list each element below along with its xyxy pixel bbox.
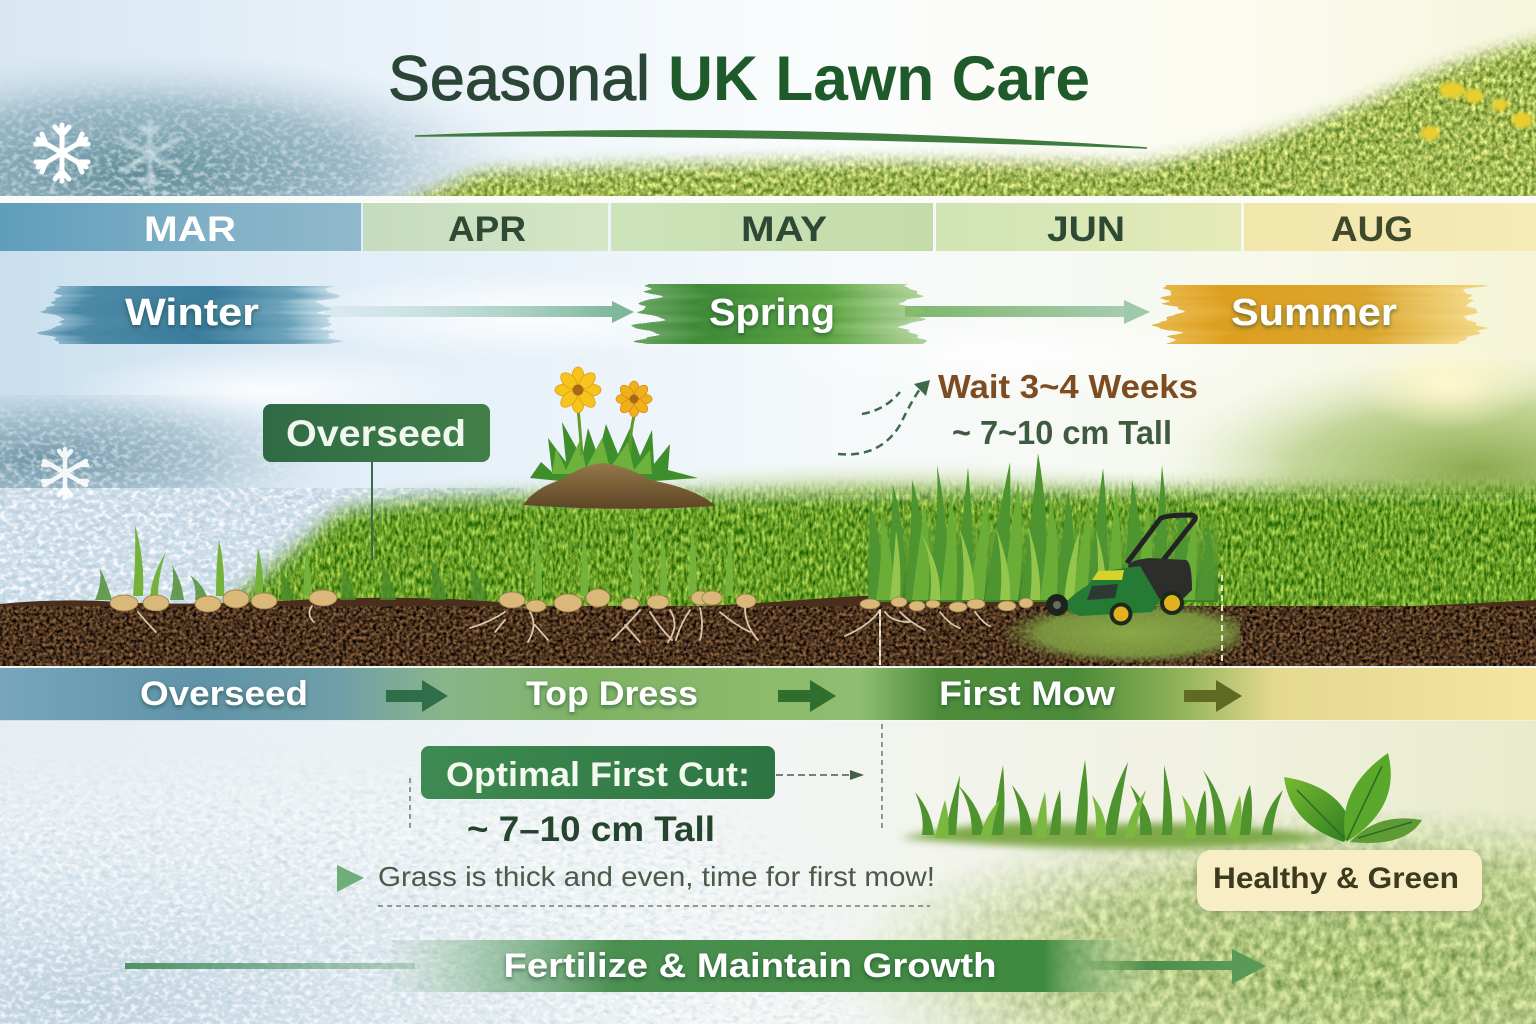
arrow band: fertilize and maintain growth [125,940,1266,992]
month: JUN: JUN [1047,210,1125,249]
month: MAR: MAR [144,210,236,249]
flower small [616,381,652,417]
note: wait time: Wait 3~4 Weeks [938,368,1198,405]
connector: overseed stem [371,462,373,560]
short blades near soil [95,558,486,600]
icon: faint snowflake header [122,123,178,187]
month: MAR [0,203,361,251]
note: wait time: ~ 7~10 cm Tall [952,414,1172,451]
season: Spring [648,284,912,344]
tall grass [868,453,1218,602]
panel: header scene [0,0,1536,198]
month: MAY [611,203,933,251]
badge: Healthy & Green: Healthy & Green [1213,862,1459,895]
panel: process band [0,666,1536,720]
title: Seasonal [388,44,650,114]
arrow: step two [778,680,836,712]
callout: optimal first cut [421,746,775,799]
seeds [110,589,1033,612]
arrow: step three [1184,680,1242,712]
icon: green leaves [1284,753,1422,843]
month: MAY: MAY [741,210,827,249]
text: height: ~ 7–10 cm Tall [467,810,715,849]
snow field left [0,771,868,1024]
arrow: dashed curve [838,386,922,454]
season: Spring: Spring [709,292,835,334]
panel: month timeline bar [0,196,1536,251]
season: Summer [1172,285,1472,344]
step: First Mow: First Mow [939,675,1116,713]
icon: snowflake mid [43,449,87,497]
month: AUG [1244,203,1536,251]
note: wait time [938,368,1198,451]
step: Overseed: Overseed [140,675,308,713]
step: Top Dress: Top Dress [526,675,698,713]
panel: lawn cross-section scene [0,340,1536,666]
illustration: flower mound [523,367,716,509]
arrow: winter to spring [325,301,634,323]
title [388,44,1090,114]
icon: yellow flowers [1421,82,1532,140]
distant snow and trees [0,340,1536,495]
dashed marker lines [880,575,1222,665]
title: UK Lawn Care [668,44,1090,114]
label: Overseed [263,404,490,462]
badge: Healthy & Green [1197,850,1482,911]
season: Winter: Winter [125,292,259,334]
month: APR: APR [448,210,526,249]
arrow: step one [386,680,448,712]
label: Overseed: Overseed [286,413,466,454]
season: Summer: Summer [1231,292,1397,334]
month: JUN [936,203,1241,251]
connector: cut to grass [378,724,930,906]
grass field [214,474,1536,606]
roots [138,606,990,660]
month: APR [363,203,608,251]
soil layer [0,593,1536,666]
icon: snowflake header [36,125,88,181]
season: Winter [56,286,328,344]
flower large [555,367,601,413]
arrow: spring to summer [905,300,1150,324]
sky clouds: middle [60,270,1280,430]
arrowhead: dashed curve [914,380,930,396]
text: fertilize: Fertilize & Maintain Growth [504,947,996,985]
snowy ground left [0,488,520,604]
illustration: grass tuft [900,760,1340,849]
seedling blades [133,520,733,596]
icon: lawn mower [1046,515,1195,626]
text: grass note: Grass is thick and even, time for first mow! [378,861,935,892]
mown patch [1000,604,1240,662]
title underline stroke [415,131,1147,148]
callout: optimal first cut: Optimal First Cut: [446,756,750,794]
panel: lower ground [0,721,1536,1024]
icon: triangle bullet [337,865,364,892]
grass field right [820,810,1536,1024]
arrow: dashed to grass [776,770,864,780]
month: AUG: AUG [1331,210,1413,249]
